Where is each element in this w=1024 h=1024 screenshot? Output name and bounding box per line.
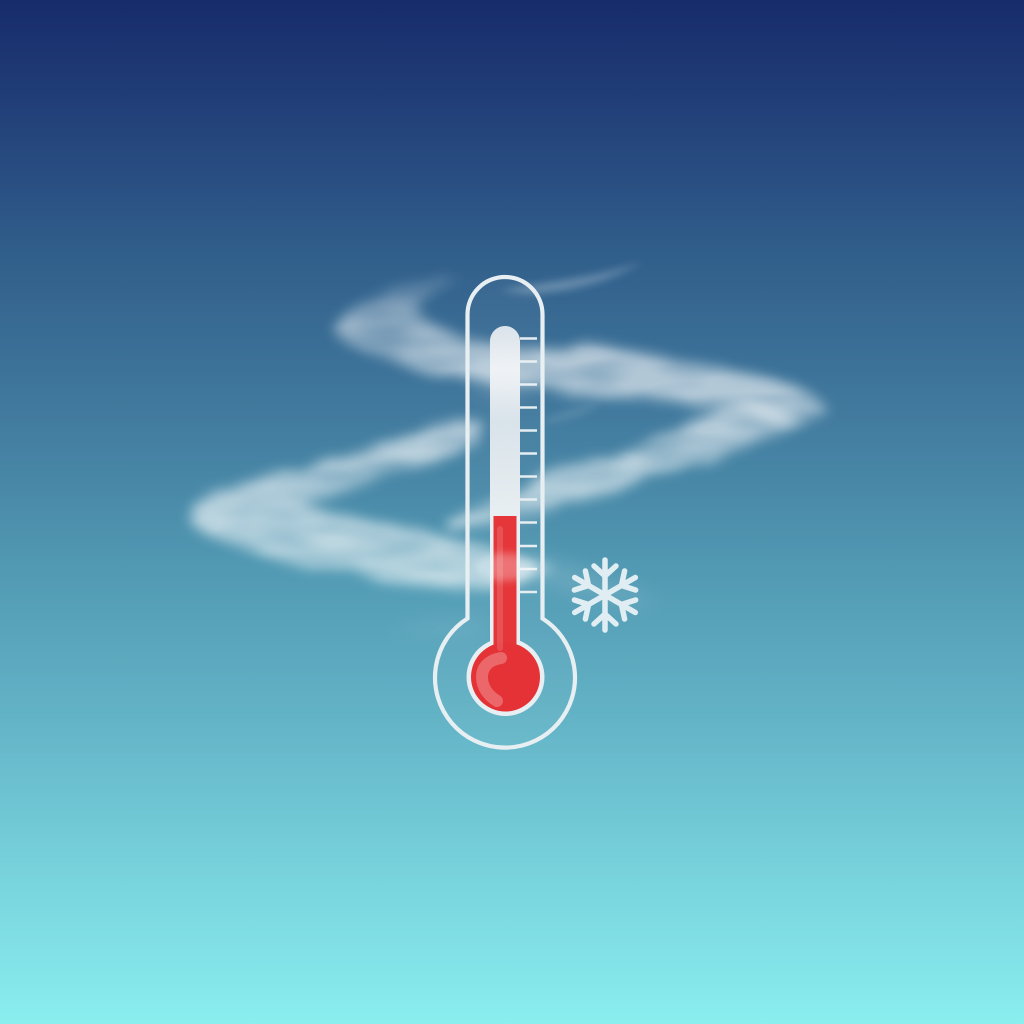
wisp: faint trailing end <box>520 552 660 604</box>
wisp: faint middle streak <box>545 404 600 424</box>
smoke passing over glass <box>471 350 539 394</box>
wisp: faint lower patch <box>385 618 480 635</box>
wisp: thin top tail <box>500 262 642 294</box>
wisp: upper ribbon <box>336 279 826 426</box>
inner tube, empty section <box>490 326 520 645</box>
thermometer <box>435 277 575 748</box>
icon: snowflake <box>569 560 641 630</box>
cold air wisp <box>187 262 826 635</box>
red mercury column <box>494 516 516 656</box>
red mercury bulb <box>471 642 540 712</box>
smoke passing over column <box>475 553 535 581</box>
wisp: middle return ribbon <box>443 405 808 526</box>
column highlight <box>497 529 503 648</box>
thermometer glass outline <box>435 277 575 748</box>
scale tick marks <box>520 338 537 592</box>
wisp: lower left ribbon <box>187 420 555 590</box>
bulb highlight <box>482 658 501 701</box>
bulb ring <box>466 638 544 716</box>
